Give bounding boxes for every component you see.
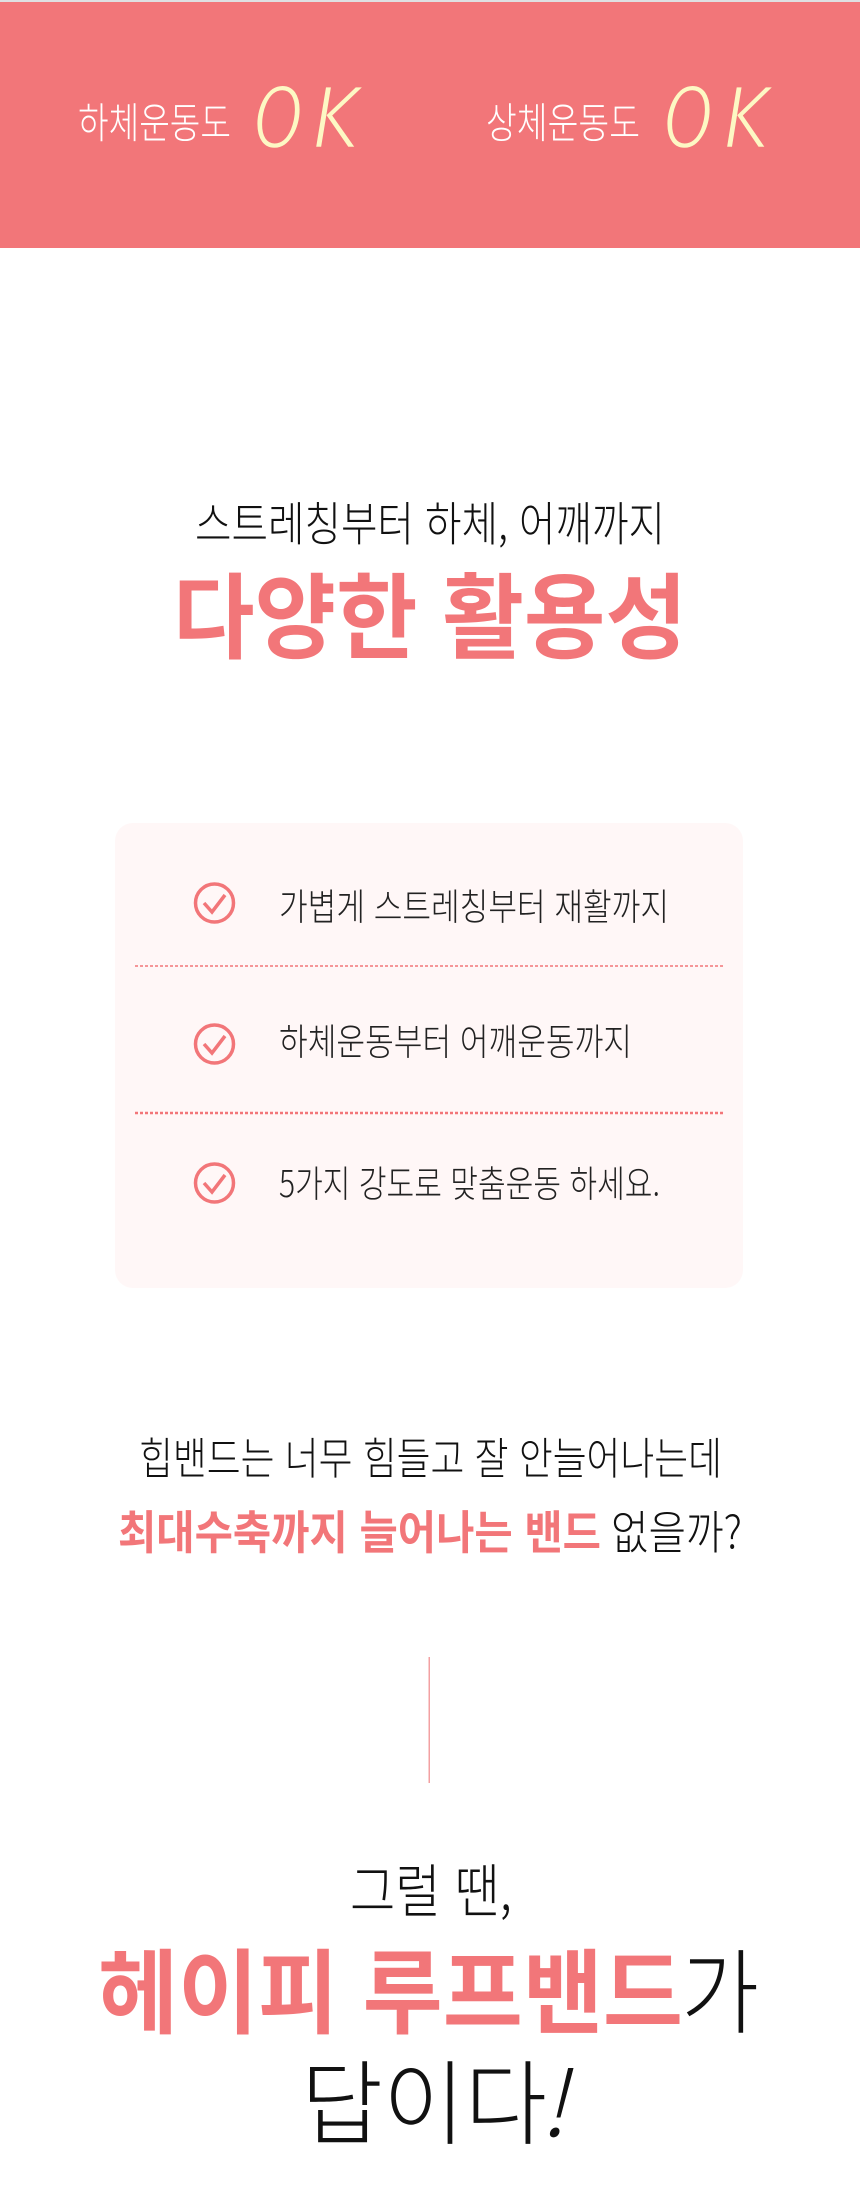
label: upper body exercise: 상체운동도 [486,90,640,151]
icon: check 3 [196,1164,234,1202]
label: OK lower body: O [254,70,303,169]
icon: check 2 [196,1025,234,1063]
subheading: 스트레칭부터 하체, 어깨까지 [195,486,665,555]
lead-in text: 그럴 땐, [350,1845,512,1929]
item text 3: 5가지 강도로 맞춤운동 하세요. [279,1154,660,1208]
label: OK upper body: K [724,70,775,169]
question line 2: 최대수축까지 늘어나는 밴드 [118,1497,601,1563]
item text 1: 가볍게 스트레칭부터 재활까지 [279,877,669,931]
conclusion line 2: 답이다 [301,2031,547,2164]
vertical connector line [428,1657,430,1783]
item text 2: 하체운동부터 어깨운동까지 [279,1012,632,1066]
question line 1: 힙밴드는 너무 힘들고 잘 안늘어나는데 [139,1423,722,1487]
label: OK lower body [254,70,365,169]
icon: check 1 [196,884,234,922]
label: OK upper body: O [664,70,713,169]
heading: 다양한 활용성 [173,543,687,678]
conclusion line 1: 가 [681,1920,759,2053]
question line 2: 없을까? [611,1497,742,1563]
label: OK lower body: K [313,70,365,169]
panel: top banner [0,0,860,248]
conclusion line 1: 헤이피 루프밴드 [98,1920,683,2053]
conclusion line 2: ! [540,2031,574,2164]
divider 2 [135,1112,724,1114]
divider 1 [135,965,724,967]
label: OK upper body [664,70,775,169]
panel: checklist [115,823,743,1288]
label: lower body exercise: 하체운동도 [78,90,231,151]
